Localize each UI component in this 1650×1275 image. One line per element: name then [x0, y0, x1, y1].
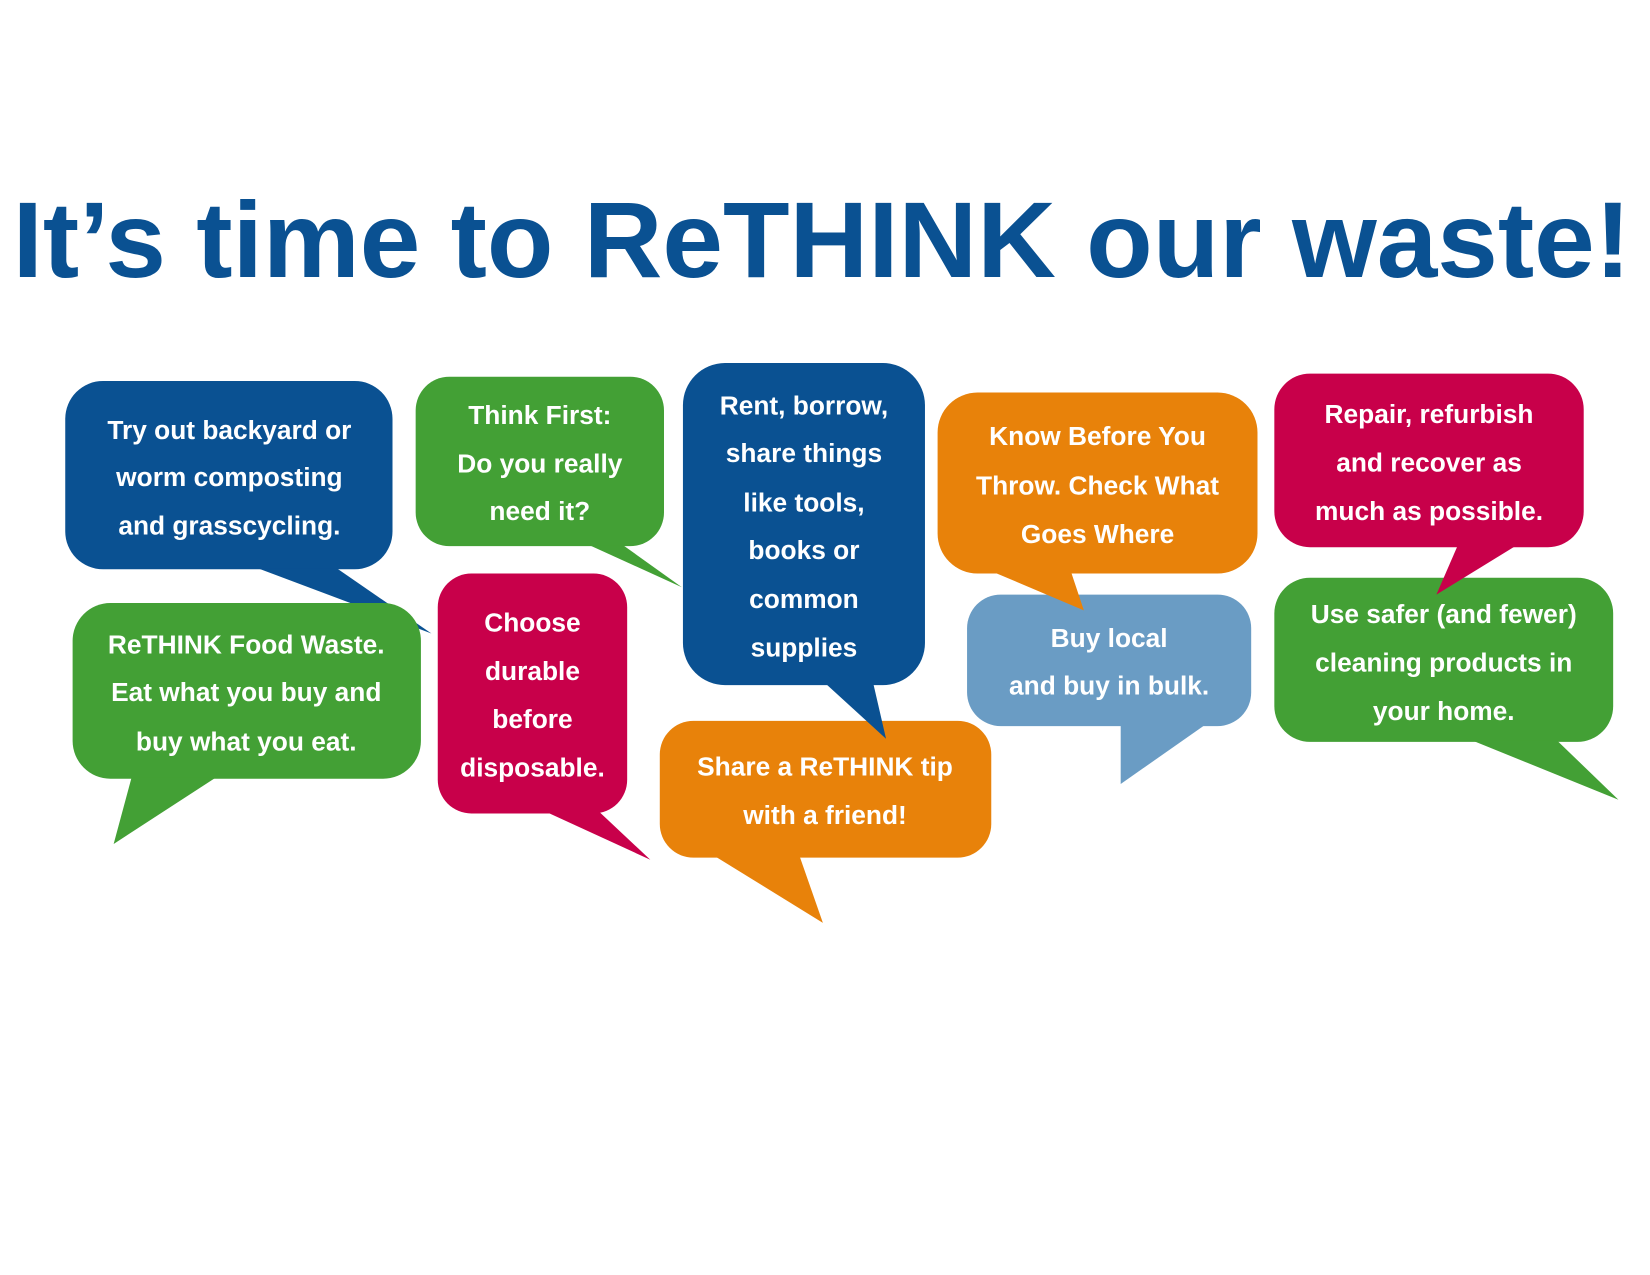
bubble: safer cleaning: your home.	[1373, 696, 1515, 726]
bubble: choose durable	[438, 574, 650, 860]
bubble: know before you throw: Goes Where	[1021, 519, 1174, 549]
bubble: food waste: buy what you eat.	[136, 726, 357, 756]
bubble: choose durable: Choose	[484, 607, 581, 637]
bubble: repair refurbish	[1274, 374, 1584, 595]
bubble: rent borrow share: supplies	[751, 633, 857, 663]
bubble: rent borrow share: Rent, borrow,	[720, 391, 888, 421]
bubble: backyard composting: and grasscycling.	[118, 511, 340, 541]
bubble: food waste: ReTHINK Food Waste.	[108, 629, 385, 659]
bubble: safer cleaning	[1274, 578, 1618, 800]
bubble: buy local	[967, 595, 1251, 784]
bubble: safer cleaning: Use safer (and fewer)	[1311, 599, 1577, 629]
bubble: food waste	[73, 603, 421, 844]
bubble: backyard composting	[65, 381, 431, 634]
bubble: rent borrow share: books or	[748, 535, 859, 565]
bubble: share a tip	[660, 721, 991, 923]
bubble: rent borrow share: common	[749, 584, 859, 614]
bubble: know before you throw: Know Before You	[989, 421, 1206, 451]
bubble: know before you throw: Throw. Check What	[976, 471, 1219, 501]
bubble: choose durable: before	[492, 704, 573, 734]
bubble: buy local: and buy in bulk.	[1009, 671, 1209, 701]
title: It’s time to ReTHINK our waste!	[13, 180, 1631, 300]
bubble: safer cleaning: cleaning products in	[1315, 647, 1572, 677]
bubble: know before you throw	[938, 393, 1257, 610]
bubble: rent borrow share: share things	[726, 438, 882, 468]
bubble: backyard composting: Try out backyard or	[107, 415, 351, 445]
bubble: share a tip: Share a ReTHINK tip	[697, 752, 953, 782]
bubble: think first	[416, 377, 682, 587]
bubble: food waste: Eat what you buy and	[111, 677, 381, 707]
bubble: repair refurbish: much as possible.	[1315, 496, 1543, 526]
bubble: repair refurbish: Repair, refurbish	[1325, 399, 1534, 429]
bubble: think first: need it?	[489, 496, 590, 526]
bubble: rent borrow share	[683, 363, 925, 739]
bubble: think first: Think First:	[468, 400, 611, 430]
bubble: share a tip: with a friend!	[742, 800, 907, 830]
bubble: repair refurbish: and recover as	[1336, 447, 1522, 477]
bubble: think first: Do you really	[457, 449, 623, 479]
bubble: choose durable: disposable.	[460, 753, 605, 783]
bubble: rent borrow share: like tools,	[743, 487, 865, 517]
bubble: backyard composting: worm composting	[115, 462, 343, 492]
bubble: buy local: Buy local	[1051, 623, 1168, 653]
bubble: choose durable: durable	[485, 656, 580, 686]
